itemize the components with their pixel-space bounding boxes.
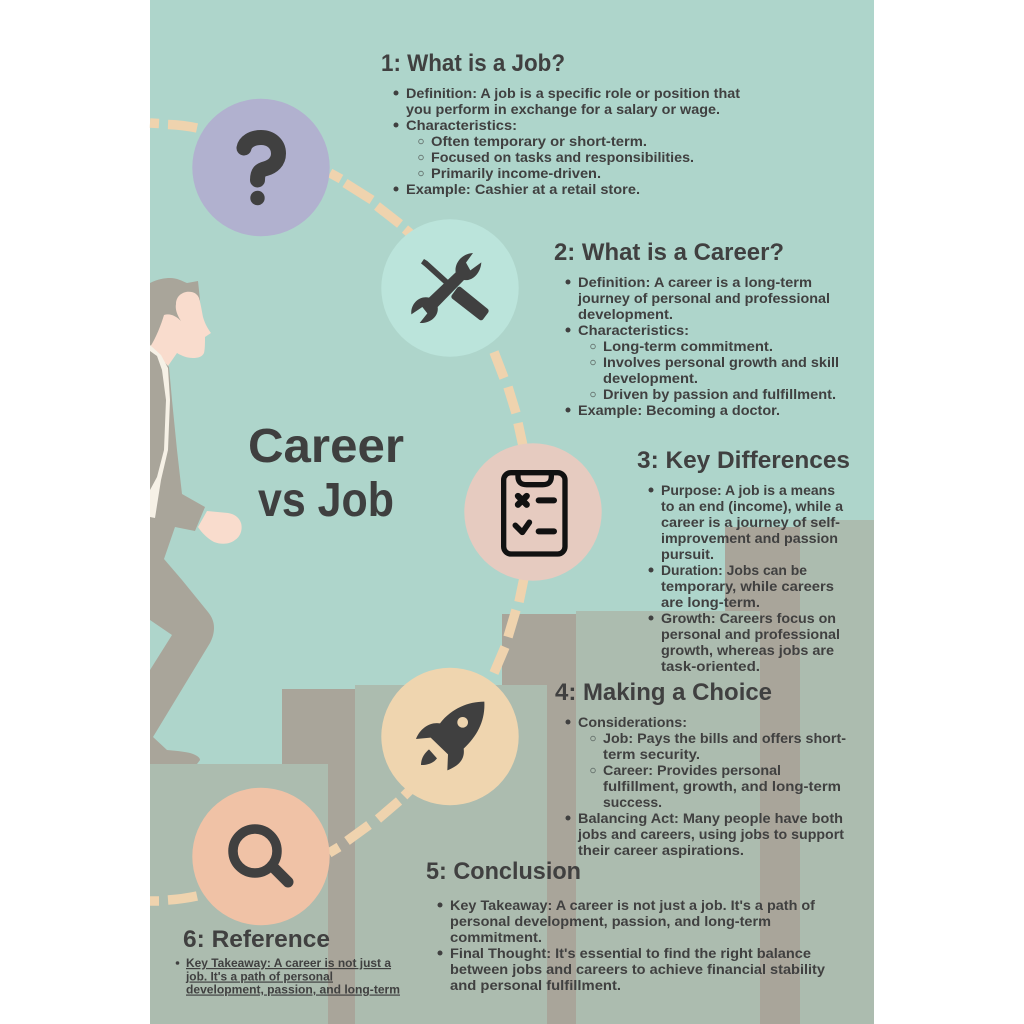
text block 2: Driven by passion and fulfillment. xyxy=(603,386,836,402)
panel: 2 What is a Career xyxy=(554,239,839,418)
reference link text: Key Takeaway: A career is not just a xyxy=(186,956,391,970)
reference link text xyxy=(176,956,400,996)
text block 3: Growth: Careers focus on xyxy=(661,610,836,626)
text block 2: Involves personal growth and skill xyxy=(603,354,839,370)
text block 2: development. xyxy=(578,306,673,322)
step 5 circle: magnifier xyxy=(192,788,330,925)
text block 2 xyxy=(566,274,839,418)
text block 5: Key Takeaway: A career is not just a job. It's a path of xyxy=(450,897,815,913)
text block 1 xyxy=(394,85,740,197)
text block 2: Example: Becoming a doctor. xyxy=(578,402,780,418)
text block 2: Characteristics: xyxy=(578,322,689,338)
reference link text: job. It's a path of personal xyxy=(185,970,333,984)
heading 4: 4: Making a Choice xyxy=(555,679,772,706)
step 2 circle: tools xyxy=(381,219,519,357)
text block 1: Often temporary or short-term. xyxy=(431,133,647,149)
text block 3: improvement and passion xyxy=(661,530,838,546)
page background xyxy=(150,0,874,1024)
text block 3: temporary, while careers xyxy=(661,578,834,594)
text block 1: you perform in exchange for a salary or wage. xyxy=(406,101,720,117)
text block 5: between jobs and careers to achieve financial stability xyxy=(450,961,825,977)
text block 4: fulfillment, growth, and long-term xyxy=(603,778,841,794)
text block 5 xyxy=(438,897,825,993)
title: Career xyxy=(248,420,404,473)
heading 2: 2: What is a Career? xyxy=(554,239,784,266)
text block 3: career is a journey of self- xyxy=(661,514,840,530)
text block 3: personal and professional xyxy=(661,626,840,642)
text block 2: journey of personal and professional xyxy=(577,290,830,306)
text block 4: term security. xyxy=(603,746,700,762)
text block 1: Focused on tasks and responsibilities. xyxy=(431,149,694,165)
text block 3: pursuit. xyxy=(661,546,714,562)
heading 1: 1: What is a Job? xyxy=(381,50,565,77)
text block 3 xyxy=(648,482,843,674)
panel: 1 What is a Job xyxy=(381,50,740,197)
text block 4: Considerations: xyxy=(578,714,687,730)
text block 3: are long-term. xyxy=(661,594,760,610)
text block 4: success. xyxy=(603,794,662,810)
step 1 circle: question mark xyxy=(192,99,330,236)
illustration: walking businessman xyxy=(150,278,242,764)
text block 5: personal development, passion, and long-term xyxy=(450,913,771,929)
text block 2: Long-term commitment. xyxy=(603,338,773,354)
panel: 4 Making a Choice xyxy=(555,679,846,858)
heading 6: 6: Reference xyxy=(183,926,330,953)
text block 3: growth, whereas jobs are xyxy=(661,642,834,658)
text block 3: to an end (income), while a xyxy=(661,498,843,514)
icon: clipboard checklist xyxy=(504,473,565,554)
icon: rocket xyxy=(416,702,484,770)
text block 3: Duration: Jobs can be xyxy=(661,562,807,578)
icon: wrench and screwdriver xyxy=(411,253,486,323)
illustration: city blocks xyxy=(150,520,874,1024)
reference link text: development, passion, and long-term xyxy=(186,982,400,996)
text block 4: their career aspirations. xyxy=(578,842,744,858)
heading 5: 5: Conclusion xyxy=(426,858,581,885)
text block 2: Definition: A career is a long-term xyxy=(578,274,812,290)
text block 1: Primarily income-driven. xyxy=(431,165,601,181)
text block 4: Career: Provides personal xyxy=(603,762,781,778)
panel: 5 Conclusion xyxy=(426,858,825,993)
text block 4 xyxy=(566,714,846,858)
heading 3: 3: Key Differences xyxy=(637,447,850,474)
dashed path connecting the steps xyxy=(150,123,524,901)
text block 1: Example: Cashier at a retail store. xyxy=(406,181,640,197)
title: vs Job xyxy=(258,474,394,527)
text block 1: Definition: A job is a specific role or position that xyxy=(406,85,740,101)
panel: 6 Reference xyxy=(176,926,400,996)
text block 5: Final Thought: It's essential to find the right balance xyxy=(450,945,811,961)
panel: 3 Key Differences xyxy=(637,447,850,674)
icon: magnifying glass xyxy=(233,829,288,882)
text block 5: commitment. xyxy=(450,929,542,945)
step 4 circle: rocket xyxy=(381,668,519,805)
text block 5: and personal fulfillment. xyxy=(450,977,621,993)
text block 4: Balancing Act: Many people have both xyxy=(578,810,843,826)
text block 3: Purpose: A job is a means xyxy=(661,482,835,498)
text block 4: jobs and careers, using jobs to support xyxy=(577,826,844,842)
step 3 circle: checklist xyxy=(464,443,602,581)
text block 4: Job: Pays the bills and offers short- xyxy=(603,730,846,746)
text block 1: Characteristics: xyxy=(406,117,517,133)
title xyxy=(248,420,404,527)
text block 2: development. xyxy=(603,370,698,386)
text block 3: task-oriented. xyxy=(661,658,760,674)
icon: question mark xyxy=(244,138,278,205)
